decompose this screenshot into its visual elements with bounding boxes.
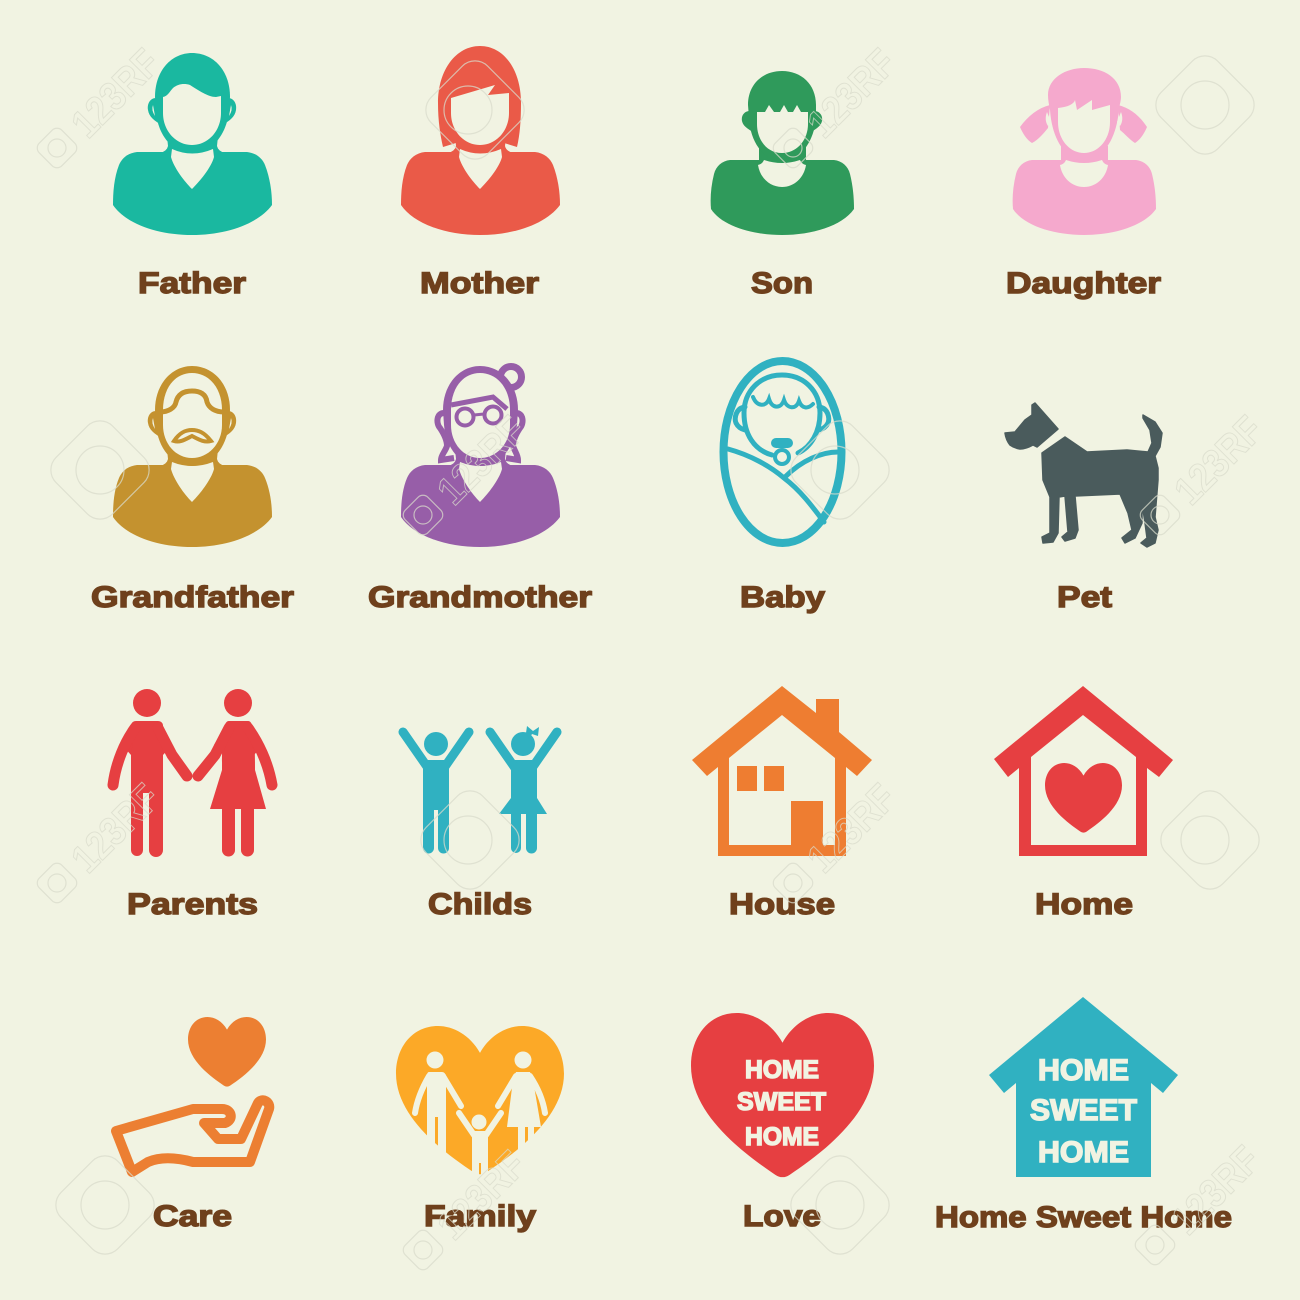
label: Daughter: Daughter xyxy=(1006,267,1161,300)
icon: baby xyxy=(724,361,842,543)
label: Home Sweet Home: Home Sweet Home xyxy=(935,1201,1232,1234)
label: House: House xyxy=(729,888,835,921)
label: Mother: Mother xyxy=(420,267,539,300)
icon: love heart: HOME xyxy=(745,1123,819,1151)
label: Pet: Pet xyxy=(1057,581,1112,614)
panel: mother xyxy=(401,46,560,300)
label: Grandfather: Grandfather xyxy=(91,581,294,614)
icon: dog xyxy=(1005,403,1162,547)
panel: love xyxy=(691,1013,874,1233)
watermarks: 123RF xyxy=(1163,1138,1269,1243)
icon: home sweet home house: SWEET xyxy=(1030,1094,1137,1127)
panel: baby xyxy=(724,361,842,614)
panel: care xyxy=(116,1017,269,1233)
label: Son: Son xyxy=(751,267,813,300)
panel: childs xyxy=(403,726,557,921)
icon: grandmother xyxy=(401,366,560,547)
icon: love heart: HOME xyxy=(745,1056,819,1084)
icon: home with heart xyxy=(994,686,1173,856)
icon: mother xyxy=(401,46,560,235)
label: Childs: Childs xyxy=(428,888,532,921)
watermarks: 123RF xyxy=(1166,408,1272,513)
icon: grandfather xyxy=(113,366,272,547)
icon: house xyxy=(692,686,872,856)
panel: father xyxy=(113,53,272,300)
panel: family xyxy=(396,1026,564,1233)
panel: house xyxy=(692,686,872,921)
watermarks: 123RF xyxy=(799,776,905,881)
watermarks: 123RF xyxy=(63,41,169,146)
label: Family: Family xyxy=(424,1200,536,1233)
panel: pet xyxy=(1005,403,1162,614)
label: Baby: Baby xyxy=(740,581,825,614)
icon: home sweet home house: HOME xyxy=(1038,1136,1129,1169)
icon: heart above hand xyxy=(116,1017,269,1172)
panel: grandfather xyxy=(91,366,294,614)
panel: home xyxy=(994,686,1173,921)
watermarks: 123RF xyxy=(429,1143,535,1248)
label: Care: Care xyxy=(153,1200,232,1233)
icon: daughter xyxy=(1013,68,1156,235)
label: Love: Love xyxy=(743,1200,821,1233)
icon: parents xyxy=(113,689,272,857)
watermarks: 123RF xyxy=(429,408,535,513)
watermarks: 123RF xyxy=(799,41,905,146)
label: Grandmother: Grandmother xyxy=(368,581,592,614)
label: Home: Home xyxy=(1035,888,1133,921)
label: Parents: Parents xyxy=(127,888,258,921)
panel: son xyxy=(711,71,854,300)
icon: son xyxy=(711,71,854,235)
icon: family in heart xyxy=(396,1026,564,1176)
icon: children xyxy=(403,726,557,854)
label: Father: Father xyxy=(138,267,246,300)
watermarks: 123RF xyxy=(63,776,169,881)
icon: home sweet home house xyxy=(989,997,1178,1177)
panel: daughter xyxy=(1006,68,1161,300)
icon: home sweet home house: HOME xyxy=(1038,1054,1129,1087)
icon: love heart: SWEET xyxy=(737,1088,826,1116)
icon: love heart xyxy=(691,1013,874,1177)
panel: grandmother xyxy=(368,366,592,614)
panel: home sweet home xyxy=(935,997,1232,1234)
icon: father xyxy=(113,53,272,235)
panel: parents xyxy=(113,689,272,921)
